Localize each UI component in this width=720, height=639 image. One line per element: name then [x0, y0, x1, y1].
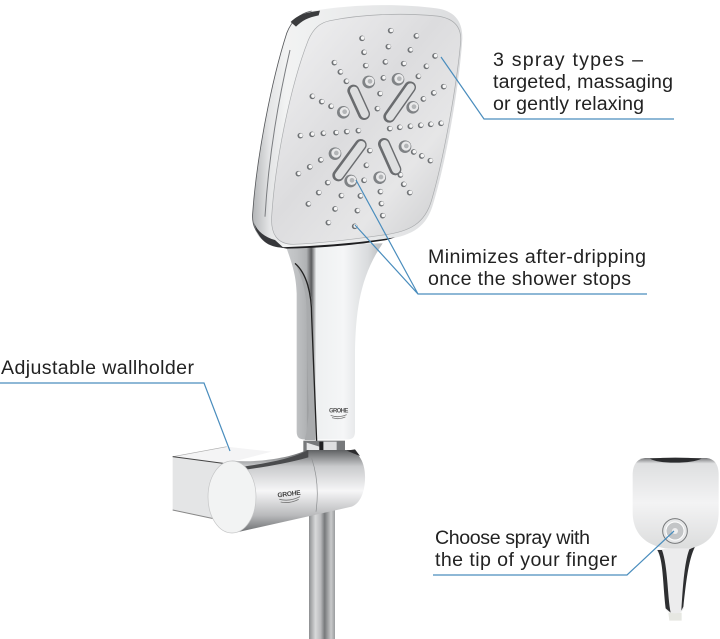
callout: after-dripping: Minimizes after-dripping	[428, 246, 646, 268]
hose rod	[309, 510, 335, 639]
callout: spray types: or gently relaxing	[493, 93, 644, 115]
callout: spray types: 3 spray types –	[493, 49, 643, 71]
head outer shell	[253, 5, 462, 248]
wall block	[173, 447, 272, 522]
callout: spray selector	[433, 527, 674, 575]
callout: after-dripping: once the shower stops	[428, 268, 631, 290]
callout: spray selector: the tip of your finger	[435, 549, 617, 571]
callout: spray types: targeted, massaging	[493, 71, 673, 93]
clamp end cap	[208, 461, 256, 533]
spray nozzles large	[329, 73, 419, 187]
GROHE logo on clamp: GROHE	[277, 490, 302, 499]
callout: spray selector: Choose spray with	[435, 527, 590, 549]
spray nozzles small	[295, 28, 446, 229]
GROHE logo on handle: GROHE	[329, 408, 348, 414]
swivel collar	[303, 441, 345, 456]
shower head	[253, 5, 462, 249]
callout: spray types	[441, 49, 674, 119]
wallholder	[173, 441, 365, 533]
callout: after-dripping	[355, 180, 647, 294]
head face	[272, 14, 461, 244]
callout: wallholder	[0, 357, 230, 451]
inset: mini shower head	[633, 458, 719, 621]
callout: wallholder: Adjustable wallholder	[1, 357, 194, 379]
spray selector button	[663, 519, 687, 543]
clamp body	[232, 450, 365, 532]
spray slots	[338, 87, 411, 175]
handle neck	[285, 243, 383, 442]
